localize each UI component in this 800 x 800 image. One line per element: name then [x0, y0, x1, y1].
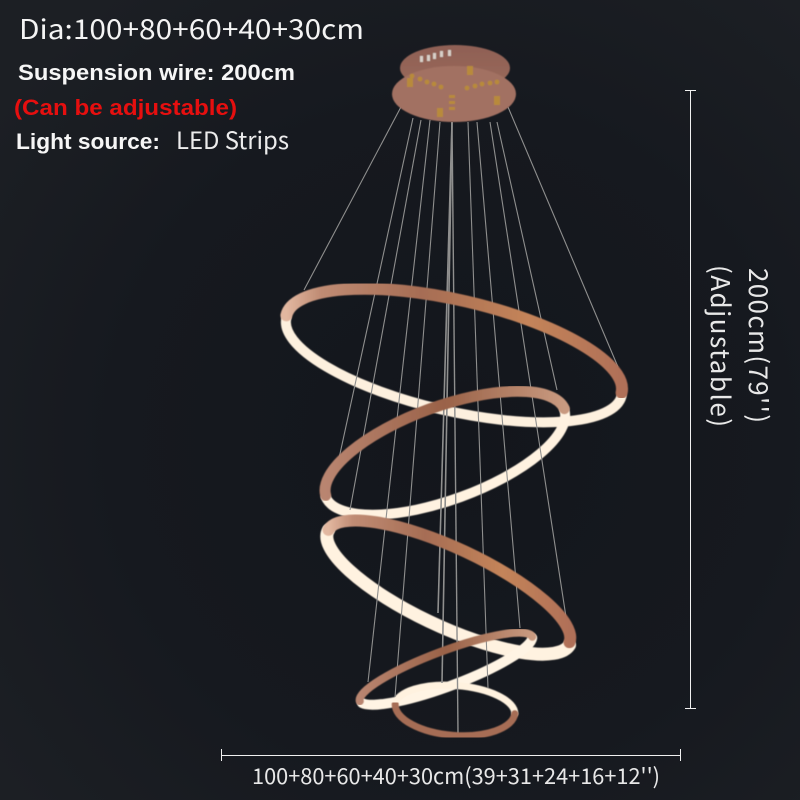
ring 1: 100cm copper band [286, 289, 622, 393]
suspension wires [304, 105, 618, 733]
adjustable label: (Adjustable) [703, 265, 740, 427]
text: light source value: LED Strips [176, 121, 289, 156]
text: can be adjustable: (Can be adjustable) [14, 95, 237, 120]
dimension line: height [685, 90, 696, 708]
text: suspension wire: Suspension wire: 200cm [18, 60, 295, 85]
height label: 200cm(79'') [741, 268, 778, 423]
ring 5: 30cm copper band [395, 704, 515, 736]
ring 2: 80cm copper band [325, 391, 564, 495]
ring 3: 60cm copper band [328, 520, 570, 642]
ring 4: 40cm copper band [360, 633, 532, 701]
title: diameters: Dia:100+80+60+40+30cm [19, 8, 364, 47]
ring lights, lit undersides [286, 318, 622, 714]
dimension line: width [221, 749, 681, 761]
ceiling canopy [392, 45, 516, 122]
text: light source label: Light source: [16, 129, 160, 154]
width label: 100+80+60+40+30cm(39+31+24+16+12'') [252, 759, 660, 791]
